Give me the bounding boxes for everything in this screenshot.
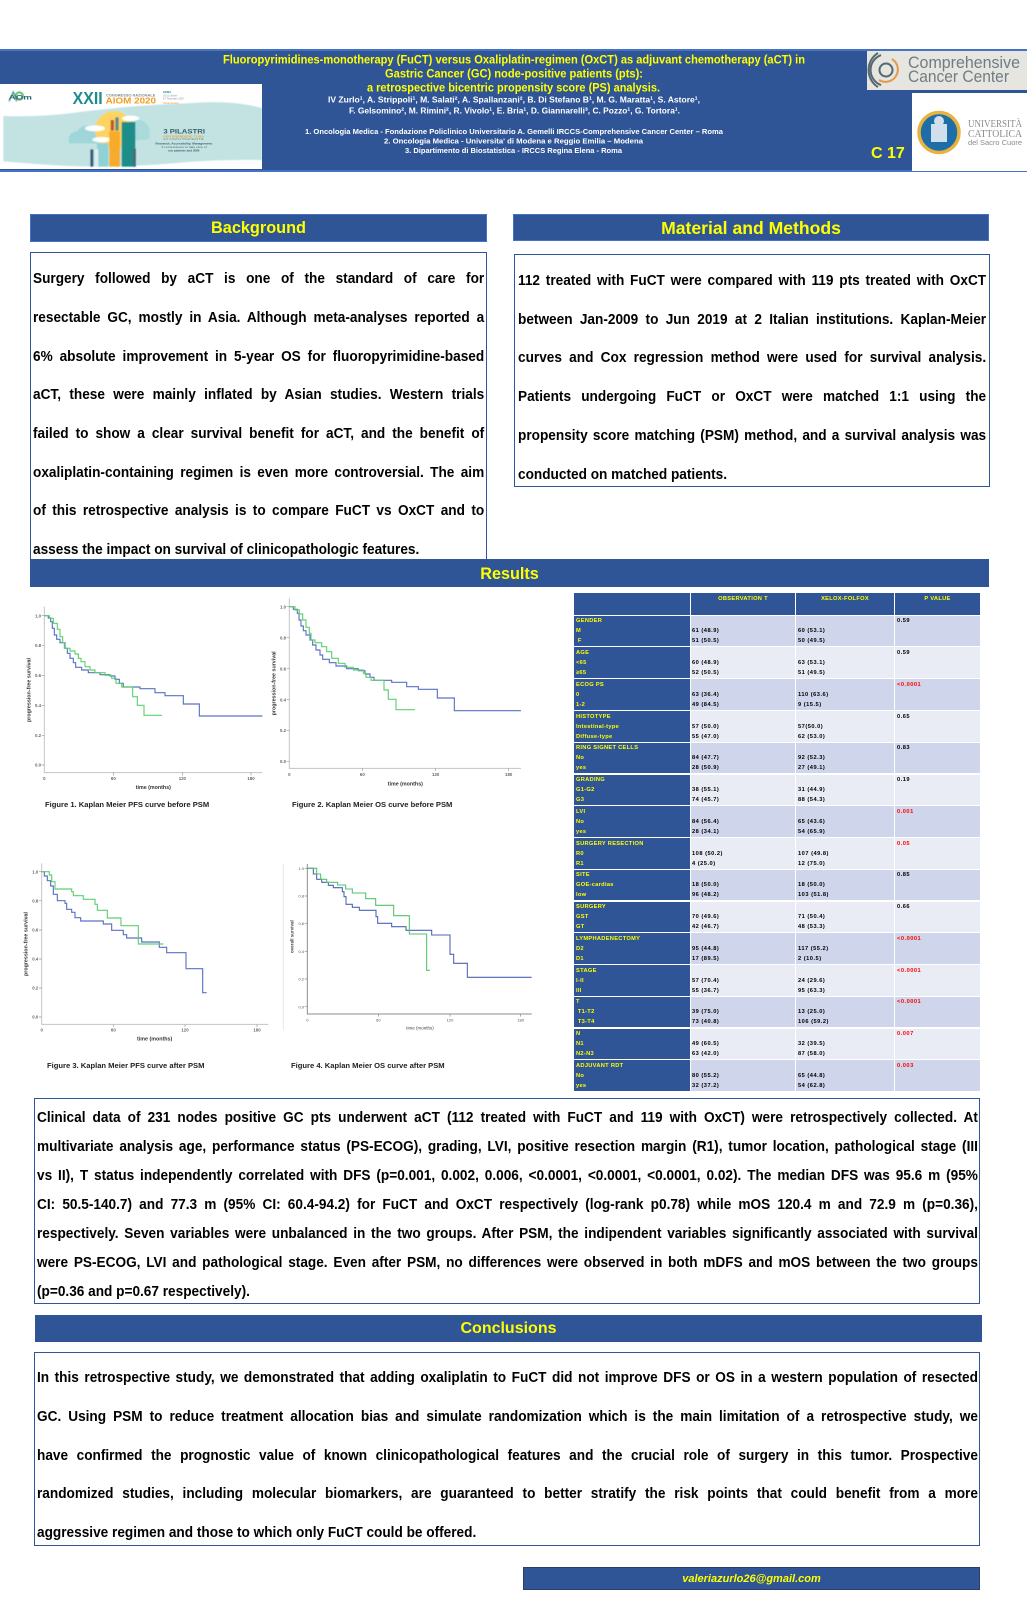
panel: background text: failed to show a clear survival benefit for aCT, and the benefit of: [32, 426, 484, 442]
panel: clinical results text: CI: 50.5-140.7) and 77.3 m (95% CI: 60.4-94.2) for FuCT and OxCT respectively (log-rank p0.78) while mOS 120.4 m and 72.9 m (p=0.36),: [37, 1197, 978, 1213]
row: stage: 57 (70.4): [692, 978, 719, 984]
chart: figure 2 OS before PSM: 60: [360, 772, 365, 777]
heading: Material and Methods: [513, 214, 989, 241]
row: gender: 60 (53.1): [798, 628, 825, 634]
heading: Results: [30, 559, 989, 587]
row: T status: 39 (75.0): [692, 1009, 719, 1015]
row: LVI: 54 (65.9): [798, 829, 825, 835]
row: site: 18 (50.0): [692, 882, 719, 888]
row: gender: 51 (50.5): [692, 638, 719, 644]
panel: methods text: [514, 254, 990, 487]
banner wording: DI OGNI PAZIENTE: [163, 138, 205, 141]
banner wording: ROMA: [163, 90, 171, 94]
table: patient characteristics: [574, 593, 980, 1091]
authors: F. Gelsomino², M. Rimini², R. Vivolo¹, E. Bria¹, D. Giannarelli³, C. Pozzo¹, G. Tortora¹.: [349, 106, 680, 116]
row: stage: STAGE I-II III: [576, 968, 597, 994]
row: histotype: [574, 711, 980, 742]
row: adjuvant RDT: 0.003: [897, 1063, 914, 1069]
chart: figure 2 OS before PSM: 0.4: [280, 697, 287, 702]
chart: figure 1 PFS before PSM: 0.0: [35, 763, 42, 768]
row: gender: 50 (49.5): [798, 638, 825, 644]
row: N status: 49 (60.5): [692, 1041, 719, 1047]
panel: conclusions text: have confirmed the prognostic value of known clinicopathological features and the crucial role of surgery in this tumor. Prospective: [37, 1448, 978, 1464]
row: age: 63 (53.1): [798, 660, 825, 666]
row: adjuvant RDT: 80 (55.2): [692, 1073, 719, 1079]
row: age: 60 (48.9): [692, 660, 719, 666]
row: histotype: 55 (47.0): [692, 734, 719, 740]
chart: figure 4 OS after PSM: 120: [447, 1017, 454, 1022]
row: ring signet cells: 28 (50.9): [692, 765, 719, 771]
panel: conclusions text: randomized studies, including molecular biomarkers, are guaranteed to better stratify the risk points that could benefit from a more: [37, 1486, 978, 1502]
congress banner image: [0, 84, 262, 169]
authors: [328, 94, 700, 116]
row: surgery: 42 (46.7): [692, 924, 719, 930]
panel: clinical results text: were PS-ECOG, LVI and pathological stage. Even after PSM, no differences were observed in both mDFS and mOS between the two groups: [37, 1255, 978, 1271]
clouds: [69, 126, 100, 143]
chart: figure 2 OS before PSM: 120: [432, 772, 440, 777]
banner wording: [9, 88, 213, 152]
chart: figure 4 OS after PSM: overall survival: [290, 920, 295, 953]
chart: figure 4 OS after PSM: time (months): [406, 1026, 434, 1031]
row: histotype: 62 (53.0): [798, 734, 825, 740]
row: stage: 55 (36.7): [692, 988, 719, 994]
chart: figure 2 OS before PSM: 0.8: [280, 635, 287, 640]
row: histotype: HISTOTYPE Intestinal-type Diffuse-type: [576, 714, 619, 740]
chart: figure 4 OS after PSM: 0.8: [298, 894, 305, 899]
row: lymphadenectomy: [574, 933, 980, 964]
row: surgery resection: 107 (49.8): [798, 851, 829, 857]
chart: figure 1 PFS before PSM: 120: [179, 776, 187, 781]
chart: figure 3 PFS after PSM: 120: [181, 1028, 189, 1033]
row: surgery: 70 (49.6): [692, 914, 719, 920]
panel: conclusions text: [34, 1352, 980, 1546]
row: surgery resection: 108 (50.2): [692, 851, 723, 857]
panel: clinical results text: respectively. Seven variables were unbalanced in the two groups. After PSM, the indipendent variables significantly associated with survival: [37, 1226, 978, 1242]
banner wording: AOm: [9, 94, 32, 101]
row: ECOG PS: 63 (36.4): [692, 692, 719, 698]
row: N status: 87 (58.0): [798, 1051, 825, 1057]
panel: clinical results text: multivariate analysis age, performance status (PS-ECOG), grading, LVI, positive resection margin (R1), tumor location, pathological stage (III: [37, 1139, 978, 1155]
poster code: C 17: [871, 145, 905, 162]
row: grading: 31 (44.9): [798, 787, 825, 793]
row: T status: 13 (25.0): [798, 1009, 825, 1015]
row: T status: 106 (59.2): [798, 1019, 829, 1025]
panel: methods text: conducted on matched patients.: [518, 467, 727, 483]
row: N status: [574, 1029, 980, 1059]
row: histotype: 0.65: [897, 714, 910, 720]
row: ring signet cells: 0.83: [897, 745, 910, 751]
chart: figure 4 OS after PSM: 180: [517, 1017, 525, 1022]
row: ring signet cells: 92 (52.3): [798, 755, 825, 761]
row: ECOG PS: 110 (63.6): [798, 692, 829, 698]
chart: figure 3 PFS after PSM: 0.8: [32, 898, 39, 903]
banner wording: AIOM 2020: [106, 97, 157, 106]
row: T status: 73 (40.8): [692, 1019, 719, 1025]
row: LVI: 84 (56.4): [692, 819, 719, 825]
row: grading: 74 (45.7): [692, 797, 719, 803]
row: adjuvant RDT: 65 (44.8): [798, 1073, 825, 1079]
header title and authors: [223, 54, 805, 155]
landscape background: [3, 102, 262, 167]
row: site: 103 (51.8): [798, 892, 829, 898]
row: adjuvant RDT: [574, 1060, 980, 1091]
logo: Comprehensive Cancer Center: Cancer Center: [908, 67, 1009, 86]
row: grading: 38 (55.1): [692, 787, 719, 793]
sun: [95, 111, 133, 149]
chart: figure 3 PFS after PSM: 180: [253, 1028, 261, 1033]
chart: figure 1 PFS before PSM: progression-free survival: [27, 658, 33, 722]
row: lymphadenectomy: LYMPHADENECTOMY D2 D1: [576, 936, 640, 962]
chart: figure 1 PFS before PSM: 180: [247, 776, 255, 781]
AIOM mark: [16, 92, 23, 100]
authors: IV Zurlo¹, A. Strippoli¹, M. Salati², A. Spallanzani², B. Di Stefano B¹, M. G. Maratta¹, S. Astore¹,: [328, 94, 700, 104]
row: age: 51 (49.5): [798, 670, 825, 676]
panel: methods text: propensity score matching (PSM) method, and a survival analysis was: [518, 428, 986, 444]
row: age: AGE <65 ≥65: [576, 650, 589, 676]
row: surgery: 71 (50.4): [798, 914, 825, 920]
chart: figure 4 OS after PSM: 0.4: [298, 949, 305, 954]
panel: background text: of this retrospective analysis is to compare FuCT vs OxCT and to: [32, 503, 484, 519]
row: grading: 88 (54.3): [798, 797, 825, 803]
chart: figure 2 OS before PSM: 0.6: [280, 666, 287, 671]
panel: clinical results text: vs II), T status independently correlated with DFS (p=0.001, 0.002, 0.006, <0.0001, <0.0001, <0.0001, 0.02). The median DFS was 95.6 m (95%: [37, 1168, 978, 1184]
panel: background text: Surgery followed by aCT is one of the standard of care for: [32, 271, 484, 287]
row: histotype: 57(50.0): [798, 724, 823, 730]
row: surgery resection: 4 (25.0): [692, 861, 716, 867]
panel: conclusions text: In this retrospective study, we demonstrated that adding oxaliplatin to FuCT did not improve DFS or OS in a western population of resected: [37, 1370, 978, 1386]
heading: Background: Background: [211, 219, 306, 237]
row: LVI: 0.001: [897, 809, 914, 815]
row: ring signet cells: 84 (47.7): [692, 755, 719, 761]
row: N status: N N1 N2-N3: [576, 1031, 594, 1057]
banner wording: PER PRENDERE CURA: [163, 134, 204, 138]
chart: figure 2 OS before PSM: 180: [505, 772, 513, 777]
panel: background text: 6% absolute improvement in 5-year OS for fluoropyrimidine-based: [32, 349, 484, 365]
chart: figure 1 PFS before PSM: 0.2: [35, 733, 42, 738]
row: lymphadenectomy: 2 (10.5): [798, 956, 822, 962]
panel: conclusions text: GC. Using PSM to reduce treatment allocation bias and simulate randomization which is the main limitation of a retrospective study, we: [37, 1409, 978, 1425]
row: adjuvant RDT: ADJUVANT RDT No yes: [576, 1063, 623, 1089]
row: adjuvant RDT: 32 (37.2): [692, 1083, 719, 1089]
row: gender: GENDER M F: [576, 618, 602, 644]
row: surgery resection: 0.05: [897, 841, 910, 847]
row: surgery resection: 12 (75.0): [798, 861, 825, 867]
row: gender: 0.59: [897, 618, 910, 624]
chart: figure 1 PFS before PSM: [26, 606, 262, 791]
chart: figure 3 PFS after PSM: 0: [40, 1028, 43, 1033]
table header row: P VALUE: [924, 596, 951, 602]
row: LVI: 28 (34.1): [692, 829, 719, 835]
chart: figure 1 PFS before PSM: 0.4: [35, 703, 42, 708]
affiliations: 1. Oncologia Medica - Fondazione Policlinico Universitario A. Gemelli IRCCS-Comprehensive Cancer Center – Roma: [305, 127, 724, 136]
row: lymphadenectomy: 17 (89.5): [692, 956, 719, 962]
contact email: valeriazurlo26@gmail.com: [682, 1573, 821, 1585]
row: LVI: [574, 806, 980, 837]
chart: figure 4 OS after PSM: 0.0: [298, 1004, 305, 1009]
banner wording: XXII: [73, 88, 103, 108]
chart: figure 1 PFS before PSM: 0.6: [35, 673, 42, 678]
chart: figure 4 OS after PSM: [283, 864, 532, 1031]
chart: figure 1 PFS before PSM: 0: [43, 776, 46, 781]
row: ECOG PS: <0.0001: [897, 682, 921, 688]
header band: [0, 49, 1027, 172]
panel: methods text: curves and Cox regression method were used for survival analysis.: [518, 350, 986, 366]
panel: background text: assess the impact on survival of clinicopathologic features.: [32, 542, 419, 558]
panel: clinical results text: Clinical data of 231 nodes positive GC pts underwent aCT (112 treated with FuCT and 119 with OxCT) were retrospectively collected. At: [37, 1110, 978, 1126]
row: surgery: SURGERY GST GT: [576, 904, 606, 930]
row: N status: 63 (42.0): [692, 1051, 719, 1057]
panel: background text: [30, 252, 487, 560]
row: T status: [574, 997, 980, 1027]
row: ECOG PS: ECOG PS 0 1-2: [576, 682, 604, 708]
chart: figure 1 PFS before PSM: time (months): [136, 785, 171, 791]
row: grading: GRADING G1-G2 G3: [576, 777, 605, 803]
poster title: Fluoropyrimidines-monotherapy (FuCT) versus Oxaliplatin-regimen (OxCT) as adjuvant chemotherapy (aCT) in: [223, 54, 805, 66]
heading: Results: Results: [480, 565, 539, 583]
row: ECOG PS: 9 (15.5): [798, 702, 822, 708]
poster title: [223, 54, 805, 94]
table header row: OBSERVATION T: [718, 596, 768, 602]
banner wording: CONGRESSO NAZIONALE: [106, 94, 156, 98]
chart: figure 2 OS before PSM: [272, 598, 521, 788]
affiliations: [305, 127, 724, 155]
chart: figure 4 OS after PSM: 60: [376, 1017, 381, 1022]
chart: figure 1 PFS before PSM: 60: [111, 776, 116, 781]
caption: figure 2: Figure 2. Kaplan Meier OS curve before PSM: [292, 800, 452, 809]
panel: background text: oxaliplatin-containing regimen is even more controversial. The aim: [32, 465, 484, 481]
banner wording: 3 PILASTRI: [163, 128, 205, 135]
people: [90, 149, 93, 167]
row: ECOG PS: 49 (84.5): [692, 702, 719, 708]
row: ring signet cells: 27 (49.1): [798, 765, 825, 771]
row: N status: 32 (39.5): [798, 1041, 825, 1047]
row: stage: [574, 965, 980, 996]
affiliations: 3. Dipartimento di Biostatistica - IRCCS Regina Elena - Roma: [405, 146, 623, 155]
row: site: 0.85: [897, 872, 910, 878]
row: LVI: LVI No yes: [576, 809, 586, 835]
logo: Università Cattolica: del Sacro Cuore: [968, 138, 1022, 147]
chart: figure 3 PFS after PSM: 0.2: [32, 986, 39, 991]
row: age: 52 (50.5): [692, 670, 719, 676]
row: histotype: 57 (50.0): [692, 724, 719, 730]
row: N status: 0.007: [897, 1031, 914, 1037]
row: ring signet cells: [574, 743, 980, 773]
panel: clinical results text: [34, 1098, 980, 1304]
poster title: Gastric Cancer (GC) node-positive patients (pts):: [385, 68, 643, 80]
panel: methods text: 112 treated with FuCT were compared with 119 pts treated with OxCT: [518, 273, 986, 289]
chart: figure 2 OS before PSM: 0.2: [280, 728, 287, 733]
row: stage: 95 (63.3): [798, 988, 825, 994]
table header row: [574, 593, 980, 615]
affiliations: 2. Oncologia Medica - Universita' di Modena e Reggio Emilia – Modena: [384, 136, 644, 146]
chart: figure 2 OS before PSM: time (months): [388, 782, 423, 788]
chart: figure 3 PFS after PSM: 0.0: [32, 1015, 39, 1020]
panel: background text: aCT, these were mainly inflated by Asian studies. Western trials: [32, 387, 484, 403]
chart: figure 4 OS after PSM: 0.2: [298, 977, 305, 982]
logo: Comprehensive Cancer Center: Comprehensive: [908, 53, 1020, 72]
chart: figure 3 PFS after PSM: time (months): [137, 1036, 172, 1042]
chart: figure 4 OS after PSM: 1.0: [298, 866, 305, 871]
logo: Università Cattolica: [912, 93, 1027, 171]
row: ring signet cells: RING SIGNET CELLS No yes: [576, 745, 638, 771]
chart: figure 3 PFS after PSM: 0.4: [32, 957, 39, 962]
caption: figure 4: Figure 4. Kaplan Meier OS curve after PSM: [291, 1061, 445, 1070]
chart: figure 4 OS after PSM: 0.6: [298, 921, 305, 926]
row: gender: [574, 616, 980, 646]
row: ECOG PS: [574, 679, 980, 710]
row: site: 18 (50.0): [798, 882, 825, 888]
banner wording: 3 cornerstones to take care of: [161, 145, 207, 149]
row: gender: 61 (48.9): [692, 628, 719, 634]
pillars: [97, 143, 108, 167]
caption: figure 1: Figure 1. Kaplan Meier PFS curve before PSM: [45, 800, 209, 809]
row: T status: <0.0001: [897, 999, 921, 1005]
chart: figure 3 PFS after PSM: 1.0: [32, 869, 39, 874]
row: grading: 0.19: [897, 777, 910, 783]
panel: conclusions text: aggressive regimen and those to which only FuCT could be offered.: [37, 1525, 476, 1541]
row: lymphadenectomy: 117 (55.2): [798, 946, 829, 952]
row: stage: 24 (29.6): [798, 978, 825, 984]
banner wording: our patients and SSN: [168, 148, 199, 152]
panel: methods text: between Jan-2009 to Jun 2019 at 2 Italian institutions. Kaplan-Meier: [518, 312, 986, 328]
row: LVI: 65 (43.6): [798, 819, 825, 825]
row: surgery resection: [574, 838, 980, 869]
banner wording: Virtual meeting: [163, 102, 179, 105]
chart: figure 1 PFS before PSM: 0.8: [35, 643, 42, 648]
chart: figure 1 PFS before PSM: 1.0: [35, 613, 42, 618]
row: age: 0.59: [897, 650, 910, 656]
table header row: XELOX-FOLFOX: [821, 596, 869, 602]
row: site: 96 (48.2): [692, 892, 719, 898]
row: surgery: [574, 902, 980, 932]
panel: methods text: Patients undergoing FuCT or OxCT were matched 1:1 using the: [518, 389, 986, 405]
row: grading: [574, 775, 980, 805]
chart: figure 2 OS before PSM: 0.0: [280, 759, 287, 764]
poster title: a retrospective bicentric propensity score (PS) analysis.: [367, 82, 660, 94]
row: stage: <0.0001: [897, 968, 921, 974]
row: lymphadenectomy: <0.0001: [897, 936, 921, 942]
banner wording: Research, Accessibility, Management:: [155, 142, 213, 146]
chart: figure 4 OS after PSM: 0: [306, 1017, 309, 1022]
row: surgery: 48 (53.3): [798, 924, 825, 930]
heading: Conclusions: [35, 1315, 982, 1342]
contact email: [523, 1567, 980, 1590]
panel: background text: resectable GC, mostly in Asia. Although meta-analyses reported a: [32, 310, 484, 326]
chart: figure 3 PFS after PSM: 0.6: [32, 928, 39, 933]
row: surgery: 0.66: [897, 904, 910, 910]
row: site: [574, 870, 980, 900]
panel: clinical results text: (p=0.36 and p=0.67 respectively).: [37, 1284, 250, 1300]
row: lymphadenectomy: 95 (44.8): [692, 946, 719, 952]
row: age: [574, 647, 980, 678]
chart: figure 3 PFS after PSM: progression-free survival: [23, 912, 29, 976]
chart: figure 2 OS before PSM: 1.0: [280, 604, 287, 609]
heading: Material and Methods: Material and Methods: [661, 218, 841, 238]
banner wording: 6-7 Novembre 2020: [163, 98, 184, 101]
chart: figure 2 OS before PSM: progression-free survival: [272, 651, 278, 715]
chart: figure 2 OS before PSM: 0: [288, 772, 291, 777]
row: T status: T T1-T2 T3-T4: [576, 999, 595, 1025]
logo: Comprehensive Cancer Center: [867, 51, 1027, 90]
heading: Conclusions: Conclusions: [460, 1320, 556, 1337]
row: site: SITE GOE-cardias low: [576, 872, 614, 898]
row: surgery resection: SURGERY RESECTION R0 R1: [576, 841, 644, 867]
chart: figure 3 PFS after PSM: 60: [111, 1028, 116, 1033]
chart: figure 3 PFS after PSM: [23, 863, 268, 1042]
row: adjuvant RDT: 54 (62.8): [798, 1083, 825, 1089]
banner wording: 19-21 Ottobre: [163, 94, 178, 97]
caption: figure 3: Figure 3. Kaplan Meier PFS curve after PSM: [47, 1061, 204, 1070]
heading: Background: [30, 214, 487, 242]
